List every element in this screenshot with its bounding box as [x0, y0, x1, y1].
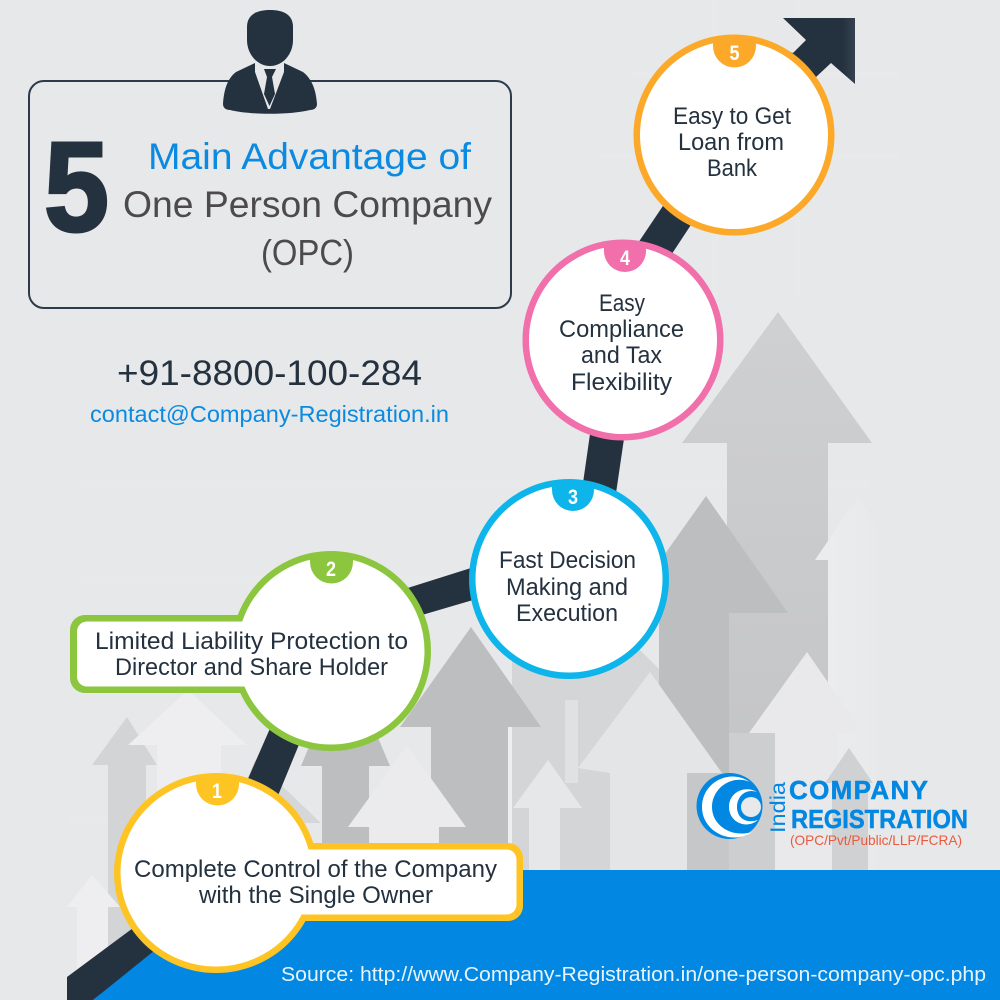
step 1: complete control: with the Single Owner: [198, 882, 433, 909]
step 5: easy loan: Loan from: [678, 129, 784, 156]
step 5: easy loan: [634, 34, 834, 236]
step 1: complete control: [114, 773, 523, 973]
big numeral 5: 5: [44, 116, 109, 258]
step 5: easy loan: Easy to Get: [673, 103, 791, 130]
logo name: COMPANY: [789, 775, 928, 805]
background rising arrows: [67, 312, 900, 1000]
step 2: limited liability: Limited Liability Protection to: [95, 628, 408, 655]
step 3: fast decision: [469, 479, 669, 679]
step 1: complete control: 1: [212, 780, 222, 803]
step 5: easy loan: Bank: [707, 155, 758, 182]
contact email: contact@Company-Registration.in: [90, 401, 449, 427]
step 4: easy compliance: 4: [620, 247, 630, 270]
source line: Source: http://www.Company-Registration.in/one-person-company-opc.php: [281, 964, 986, 986]
icon: businessman: [223, 10, 317, 114]
icon: swirl: [696, 773, 762, 839]
growth path and arrow: [67, 18, 855, 1000]
title text: One Person Company: [123, 184, 492, 225]
step 2: limited liability: 2: [326, 558, 336, 581]
step 1: complete control: Complete Control of the Company: [134, 856, 497, 883]
logo name: [789, 775, 968, 834]
logo tagline: (OPC/Pvt/Public/LLP/FCRA): [790, 832, 962, 848]
blue footer band: [93, 870, 1000, 1000]
step 2: limited liability: Director and Share Holder: [115, 654, 388, 681]
step 5: easy loan: 5: [730, 42, 740, 65]
logo India: India: [767, 782, 790, 833]
title panel: [29, 10, 511, 308]
title text: (OPC): [261, 232, 354, 273]
title text: [123, 136, 492, 273]
step 4: easy compliance: Compliance: [559, 316, 684, 343]
logo: [696, 773, 968, 848]
logo name: REGISTRATION: [791, 804, 968, 834]
contact phone: +91-8800-100-284: [117, 354, 422, 393]
step 2: limited liability: [70, 551, 431, 751]
step 4: easy compliance: Easy: [599, 290, 645, 317]
title text: Main Advantage of: [148, 136, 472, 177]
step 3: fast decision: Making and: [506, 574, 628, 601]
step 3: fast decision: 3: [568, 486, 578, 509]
step 4: easy compliance: Flexibility: [571, 369, 672, 396]
step 4: easy compliance: [522, 240, 724, 440]
step 3: fast decision: Execution: [516, 600, 618, 627]
step 3: fast decision: Fast Decision: [499, 547, 636, 574]
step 4: easy compliance: and Tax: [581, 342, 662, 369]
